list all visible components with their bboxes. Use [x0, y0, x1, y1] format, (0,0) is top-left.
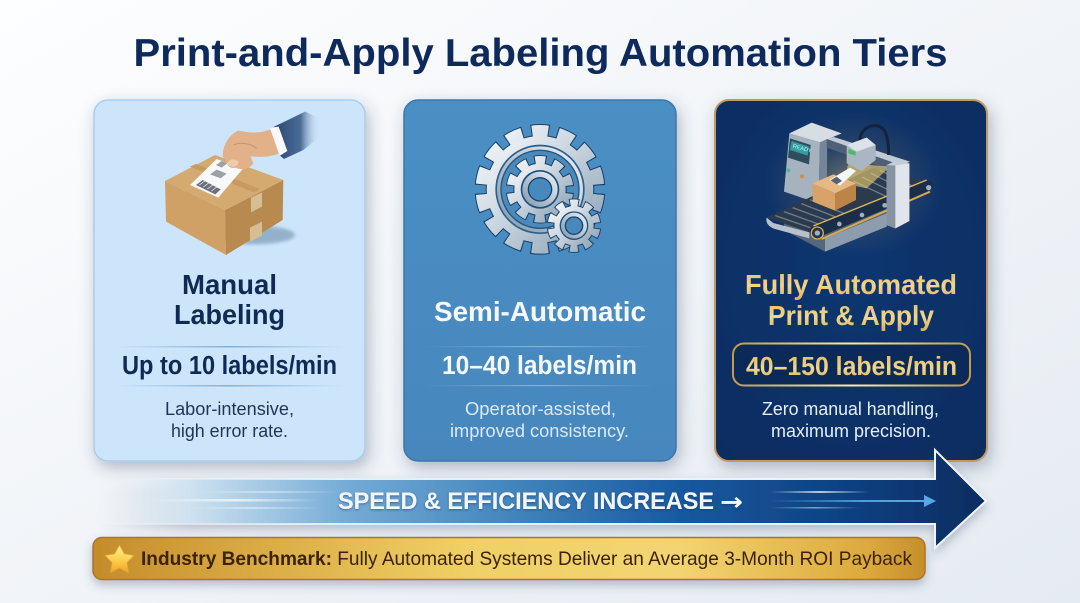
panel: manual labeling: [94, 100, 365, 461]
heading: fully automated print and apply: Print & Apply: [768, 300, 934, 331]
callout text: Industry Benchmark: Fully Automated Systems Deliver an Average 3-Month ROI Payback: [141, 548, 912, 570]
icon: conveyor print-and-apply machine: [763, 112, 943, 258]
description: semi-automatic: Operator-assisted,: [465, 399, 616, 419]
rate: up to 10 labels per minute: Up to 10 labels/min: [122, 352, 337, 380]
title: Print-and-Apply Labeling Automation Tiers: [134, 32, 948, 75]
icon: star: [105, 545, 134, 572]
arrow label: →: [720, 488, 743, 516]
rate pill: 40 to 150 labels per minute: [733, 344, 970, 386]
heading: manual labeling: [174, 269, 285, 330]
heading: manual labeling: Manual: [182, 269, 277, 300]
description: manual: [165, 399, 294, 441]
arrow: speed and efficiency increase: [100, 450, 986, 548]
panel: semi-automatic: [404, 100, 676, 461]
heading: manual labeling: Labeling: [174, 299, 285, 330]
callout: industry benchmark: [93, 538, 925, 580]
description: semi-automatic: [450, 399, 629, 441]
description: semi-automatic: improved consistency.: [450, 421, 629, 441]
description: fully automated: Zero manual handling,: [762, 399, 939, 419]
description: fully automated: maximum precision.: [771, 421, 931, 441]
heading: fully automated print and apply: [745, 269, 957, 331]
description: fully automated: [762, 399, 939, 441]
rate: 10 to 40 labels per minute: 10–40 labels/min: [442, 352, 637, 380]
icon: conveyor print-and-apply machine: READY: [792, 144, 812, 155]
heading: fully automated print and apply: Fully Automated: [745, 269, 957, 300]
arrow label: SPEED & EFFICIENCY INCREASE: [338, 488, 714, 515]
rate pill: 40 to 150 labels per minute: 40–150 labels/min: [746, 353, 957, 381]
icon: hand applying label to box: [165, 112, 320, 255]
panel: fully automated: [715, 100, 987, 461]
icon: gears: [482, 131, 598, 248]
description: manual: Labor-intensive,: [165, 399, 294, 419]
heading: semi-automatic: Semi-Automatic: [434, 296, 646, 327]
description: manual: high error rate.: [171, 421, 288, 441]
